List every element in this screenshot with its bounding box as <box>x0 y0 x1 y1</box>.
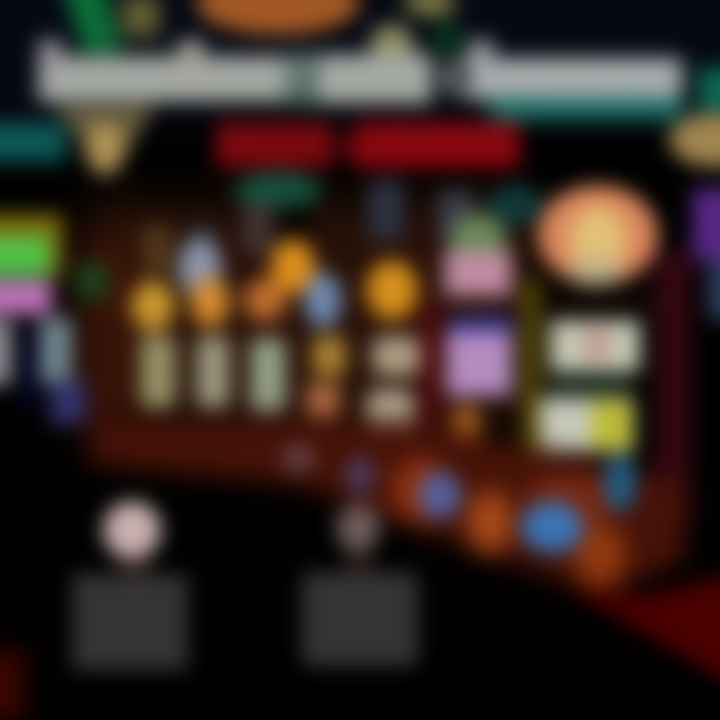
console: orange glow patches <box>392 458 626 587</box>
console: red curved deck <box>90 420 685 595</box>
slot machines: row of reels <box>140 300 440 436</box>
sign: right gold emblem and teal banner <box>669 68 720 167</box>
subtitle: red banner <box>216 122 520 168</box>
slot machine: glowing lamp <box>538 185 658 286</box>
sign: left gold emblem <box>55 106 155 180</box>
floor: red carpet wedge <box>570 565 720 700</box>
slot machine: far left screens <box>0 214 108 424</box>
subtitle: red banner: Best Slot Games <box>222 130 514 163</box>
floor: bottom-left red glow <box>0 650 25 720</box>
stool: right <box>302 504 418 666</box>
title: Online Slot Games <box>38 40 682 120</box>
background: upper dark navy wall <box>0 0 720 430</box>
title: Online Slot Games: Online Slot Games <box>40 50 680 108</box>
top decoration: marquee ornaments <box>60 0 460 72</box>
machine tops: dim panels below banner <box>143 172 543 275</box>
slot machine: purple screen cabinet <box>444 214 540 470</box>
slot machines: row of top lights <box>131 238 418 331</box>
console: buttons <box>281 443 636 553</box>
sign: left teal banner <box>0 122 66 162</box>
cabinet side: right dark red column and purple glow <box>654 188 720 520</box>
slot machine: right cabinet with screens <box>540 290 655 452</box>
stool: left <box>72 501 188 670</box>
